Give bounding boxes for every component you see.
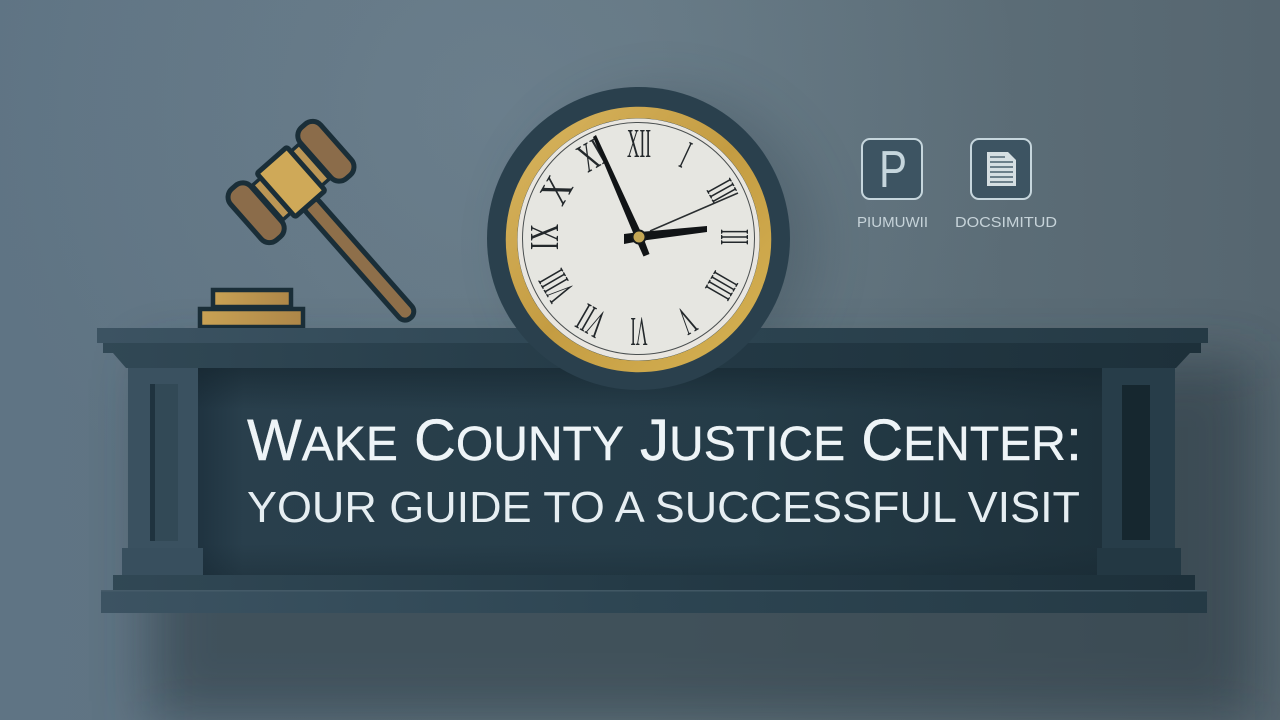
left column <box>122 368 203 575</box>
clock numerals: VI <box>630 309 648 355</box>
gavel collars <box>253 144 329 220</box>
plinth <box>101 575 1207 613</box>
gavel left cap <box>224 178 289 247</box>
gavel handle <box>301 195 417 323</box>
clock face <box>518 118 760 360</box>
title: WAKE COUNTY JUSTICE CENTER: <box>247 408 1082 473</box>
clock numerals: IX <box>521 224 567 250</box>
clock center cap <box>632 230 646 244</box>
gavel block <box>200 290 303 327</box>
clock numerals: VII <box>569 295 613 347</box>
clock <box>487 87 790 390</box>
clock minute hand <box>593 135 650 256</box>
center panel <box>198 368 1102 575</box>
clock numerals <box>521 120 758 355</box>
label: parking: PIUMUWII <box>857 214 928 231</box>
mantel <box>97 328 1208 613</box>
clock numerals: VIII <box>529 262 583 310</box>
right column <box>1097 368 1181 575</box>
icon: parking: P <box>879 141 907 199</box>
clock second hand <box>650 193 738 231</box>
clock dark surround <box>487 87 790 390</box>
clock numerals: V <box>670 298 704 344</box>
gavel right cap <box>293 117 358 186</box>
clock numerals: XII <box>627 120 651 166</box>
subtitle: YOUR GUIDE TO A SUCCESSFUL VISIT <box>247 484 1080 532</box>
clock numerals: I <box>674 132 698 176</box>
clock numerals: III <box>698 172 746 208</box>
gavel <box>224 117 456 357</box>
clock numerals: IIII <box>697 265 748 307</box>
clock hour hand <box>624 226 707 244</box>
clock numerals: III <box>712 229 758 245</box>
gavel center block <box>257 147 325 217</box>
icon: document <box>971 139 1031 199</box>
clock numerals: X <box>530 168 582 212</box>
label: documents: DOCSIMITUD <box>955 214 1057 231</box>
cornice <box>97 328 1208 368</box>
clock gold ring <box>512 112 766 366</box>
clock numerals: XI <box>569 129 613 181</box>
icon: parking <box>862 139 922 199</box>
